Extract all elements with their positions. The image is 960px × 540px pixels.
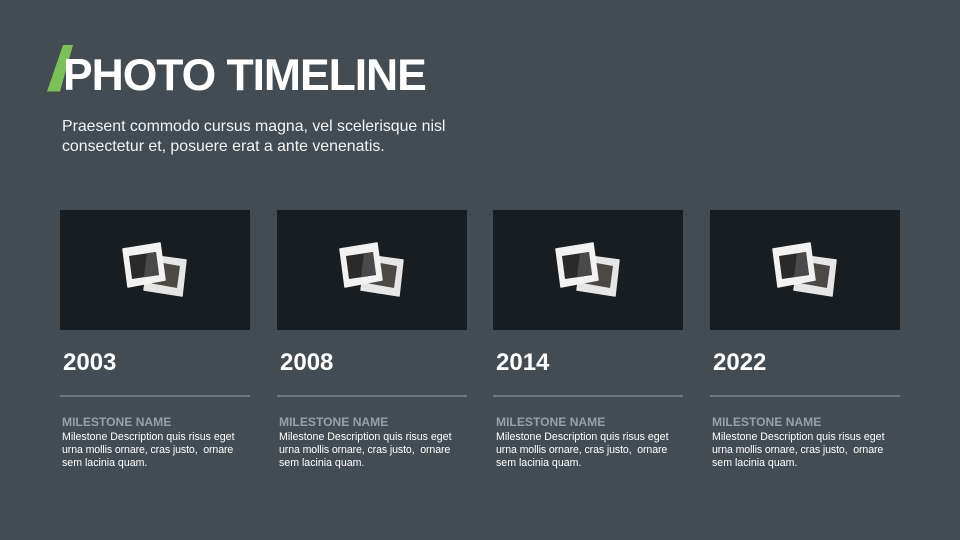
icon: photo slides [555, 242, 620, 297]
milestone description 3: urna mollis ornare, cras justo, ornare [496, 444, 667, 456]
year: 2014: 2014 [496, 349, 549, 376]
milestone description 1: Milestone Description quis risus eget [62, 430, 235, 442]
milestone description 3: sem lacinia quam. [496, 457, 581, 469]
year: 2003: 2003 [63, 349, 116, 376]
milestone description 4: Milestone Description quis risus eget [712, 430, 885, 442]
icon: photo slides [772, 242, 837, 297]
title: PHOTO TIMELINE [63, 51, 426, 100]
milestone name 1: MILESTONE NAME [62, 414, 171, 428]
milestone description 2: urna mollis ornare, cras justo, ornare [279, 444, 450, 456]
milestone description 3 [496, 430, 669, 469]
icon: photo slides [339, 242, 404, 297]
panel: 2003 photo [60, 210, 250, 330]
milestone description 1 [62, 430, 235, 469]
subtitle: Praesent commodo cursus magna, vel scelerisque nisl [62, 118, 445, 134]
year: 2008: 2008 [280, 349, 333, 376]
icon: photo slides [122, 242, 187, 297]
milestone description 4: urna mollis ornare, cras justo, ornare [712, 444, 883, 456]
panel: 2014 photo [493, 210, 683, 330]
milestone description 2: Milestone Description quis risus eget [279, 430, 452, 442]
milestone description 3: Milestone Description quis risus eget [496, 430, 669, 442]
milestone description 1: sem lacinia quam. [62, 457, 147, 469]
milestone name 4: MILESTONE NAME [712, 414, 821, 428]
milestone description 4 [712, 430, 885, 469]
milestone description 2: sem lacinia quam. [279, 457, 364, 469]
subtitle [62, 118, 445, 154]
milestone name 2: MILESTONE NAME [279, 414, 388, 428]
year: 2022: 2022 [713, 349, 766, 376]
panel: 2008 photo [277, 210, 467, 330]
milestone description 2 [279, 430, 452, 469]
icon: green slash [47, 45, 73, 92]
milestone name 3: MILESTONE NAME [496, 414, 605, 428]
subtitle: consectetur et, posuere erat a ante venenatis. [62, 138, 385, 154]
milestone description 1: urna mollis ornare, cras justo, ornare [62, 444, 233, 456]
milestone description 4: sem lacinia quam. [712, 457, 797, 469]
panel: 2022 photo [710, 210, 900, 330]
